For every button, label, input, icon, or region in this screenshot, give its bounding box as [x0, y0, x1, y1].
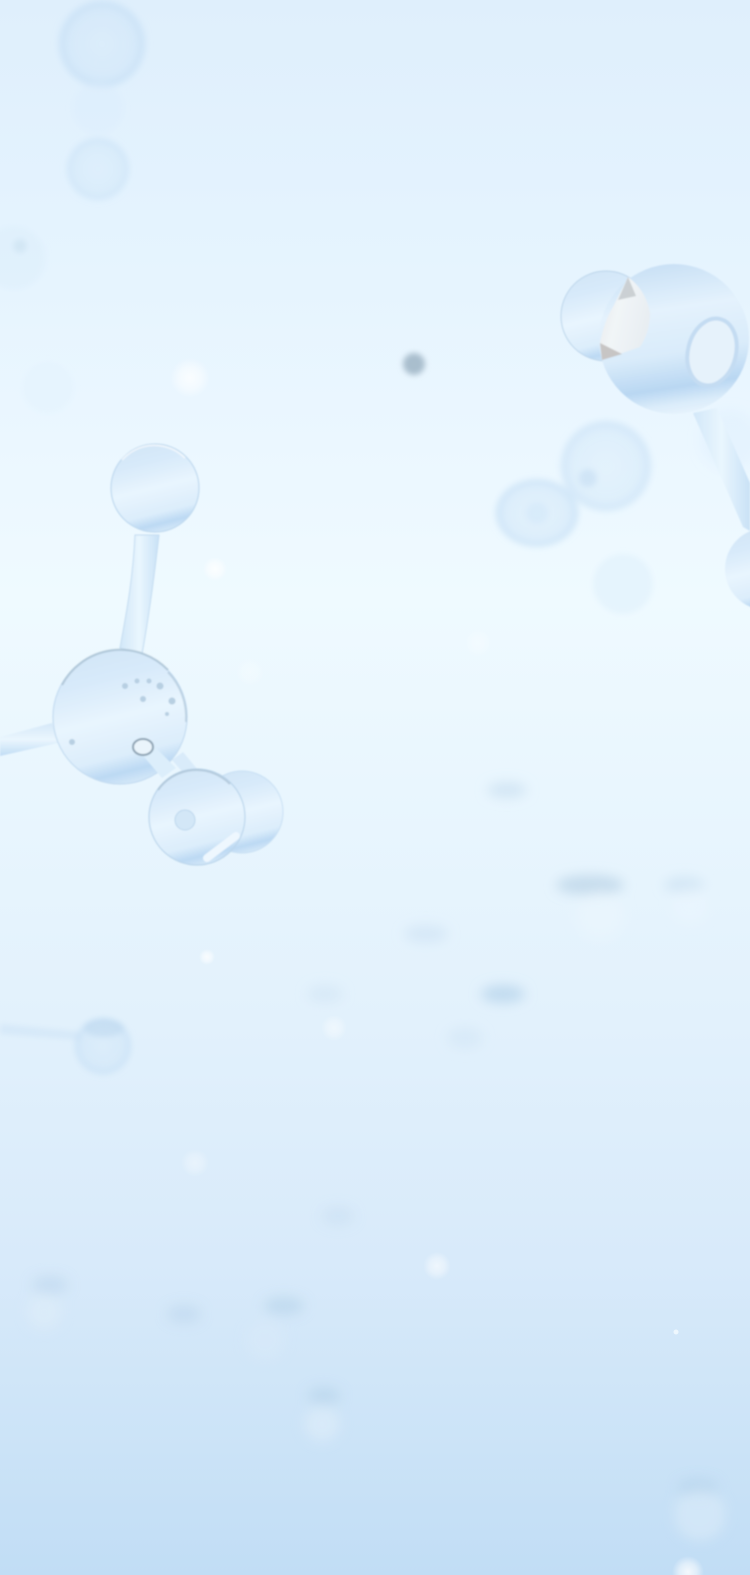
tiny speck bottom right	[674, 1330, 678, 1334]
bubbles on main sphere	[69, 678, 176, 745]
blurred molecules centre right	[493, 418, 654, 614]
blurred molecule left edge	[0, 1016, 133, 1076]
blurred molecules top left	[0, 0, 148, 414]
lower sphere	[149, 769, 245, 865]
stick to left edge	[0, 723, 58, 756]
stick to top sphere	[120, 535, 159, 654]
rear connector	[172, 752, 198, 776]
molecule: top right, in focus	[561, 264, 750, 610]
partial right-edge sphere	[725, 528, 750, 610]
top sphere	[111, 444, 199, 532]
blurred molecules mid lower	[307, 782, 708, 1049]
stick to right	[693, 408, 750, 531]
blurred molecules bottom	[26, 1207, 726, 1541]
glowing light spots	[170, 358, 704, 1575]
main sphere	[53, 650, 187, 784]
blurred stick behind right molecule	[700, 410, 750, 470]
molecule: centre left, in focus	[0, 444, 283, 865]
refracted sphere inside	[680, 313, 744, 391]
back small sphere	[201, 771, 283, 853]
dark out-of-focus speck	[403, 353, 425, 375]
shard reflection	[600, 277, 650, 360]
connector to lower sphere	[140, 744, 176, 778]
large sphere	[599, 264, 749, 414]
small back sphere	[561, 271, 651, 361]
